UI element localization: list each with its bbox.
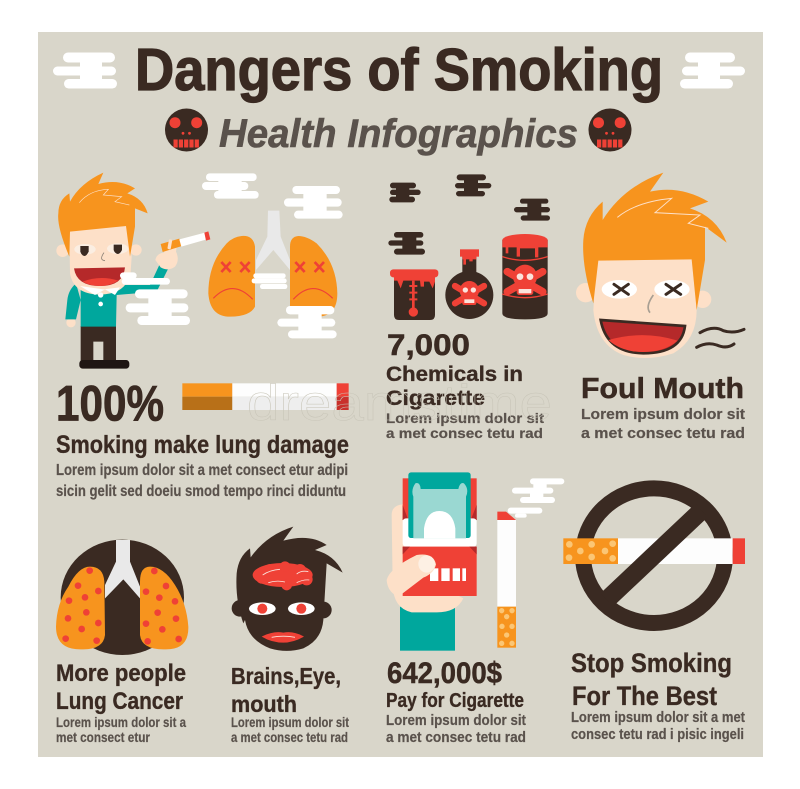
text: lung cancer body: met consect etur <box>56 730 151 745</box>
block: lung cancer text <box>56 660 186 745</box>
text: brains body <box>231 715 349 745</box>
heading: lung cancer <box>56 660 186 715</box>
illustration: pack, cigarette, no smoking <box>387 472 745 651</box>
text: foul mouth body: a met consec tetu rad <box>581 425 745 442</box>
text: chemicals body <box>386 410 544 441</box>
icon: barrel <box>502 234 548 319</box>
title: Dangers of Smoking <box>135 37 663 103</box>
heading: brains eye mouth: Brains,Eye, <box>231 663 341 689</box>
heading: pay for cigarette: Pay for Cigarette <box>386 690 524 712</box>
text: foul mouth body: Lorem ipsum dolor sit <box>581 406 745 423</box>
smoke clouds near man <box>120 272 190 325</box>
icon: right skull <box>588 108 632 152</box>
block: stop smoking text <box>571 648 745 743</box>
text: stop smoking body: consec tetu rad i pisic ingeli <box>571 727 744 743</box>
text: lung damage body: sicin gelit sed doeiu smod tempo rinci diduntu <box>56 483 346 500</box>
text: lung cancer body: Lorem ipsum dolor sit a <box>56 715 186 730</box>
text: chemicals body: a met consec tetu rad <box>386 425 543 441</box>
damaged lungs <box>208 211 337 317</box>
icon: zombie head <box>232 527 343 651</box>
text: stop smoking body: Lorem ipsum dolor sit a met <box>571 710 745 726</box>
illustration: chemicals and head <box>388 173 744 358</box>
text: brains body: a met consec tetu rad <box>231 730 348 745</box>
watermark: dreamstime <box>247 375 552 431</box>
block: pay for cigarette text <box>386 657 526 746</box>
text: foul mouth body <box>581 406 745 442</box>
icon: vertical cigarette <box>497 512 516 648</box>
heading: brains eye mouth <box>231 663 341 717</box>
stat: 100%: 100% <box>56 376 164 432</box>
icon: no smoking sign <box>563 488 745 623</box>
block: foul mouth text <box>581 373 745 442</box>
heading: foul mouth: Foul Mouth <box>581 373 744 405</box>
icon: left skull <box>165 108 208 152</box>
heading: chemicals: Chemicals in <box>386 363 523 386</box>
heading: lung cancer: Lung Cancer <box>56 688 183 715</box>
icon: hand holding pack <box>387 472 477 651</box>
text: pay body: a met consec tetu rad <box>386 729 526 746</box>
man face <box>74 243 128 286</box>
heading: cigarette: Cigarette <box>386 387 485 410</box>
stat: 7,000: 7,000 <box>387 329 470 362</box>
heading: stop smoking: Stop Smoking <box>571 648 732 678</box>
dark smoke clouds <box>388 174 550 255</box>
heading: lung damage: Smoking make lung damage <box>56 431 349 459</box>
text: stop smoking body <box>571 710 745 743</box>
heading: stop smoking <box>571 648 732 711</box>
icon: horizontal cigarette <box>182 383 349 410</box>
text: lung cancer body <box>56 715 186 745</box>
heading: brains eye mouth: mouth <box>231 691 297 717</box>
icon: cancer lungs <box>56 540 188 655</box>
text: lung damage body: Lorem ipsum dolor sit a met consect etur adipi <box>56 462 348 479</box>
smoke cloud from cigarette <box>508 478 564 518</box>
block: brains text <box>231 663 349 745</box>
hand holding cigarette <box>155 231 210 269</box>
text: brains body: Lorem ipsum dolor sit <box>231 715 349 730</box>
icon: top left cloud <box>53 52 117 88</box>
heading: stop smoking: For The Best <box>572 681 717 711</box>
text: chemicals body: Lorem ipsum dolor sit <box>386 410 544 426</box>
subtitle: Health Infographics <box>219 112 578 156</box>
man hair <box>58 173 148 257</box>
illustration: smoking man <box>56 173 343 369</box>
icon: beaker <box>390 269 438 320</box>
man body <box>56 226 168 369</box>
heading: lung cancer: More people <box>56 660 186 687</box>
text: lung damage body <box>56 462 348 500</box>
icon: flask <box>445 249 493 319</box>
text: pay body <box>386 712 526 746</box>
stat: 642,000$: 642,000$ <box>387 657 502 690</box>
icon: foul mouth head <box>576 173 744 358</box>
icon: top right cloud <box>680 52 745 88</box>
text: pay body: Lorem ipsum dolor sit <box>386 712 526 729</box>
smoke clouds around lungs <box>202 173 343 338</box>
block: chemicals text <box>386 329 544 441</box>
illustration: lung cancer and zombie head <box>56 527 343 655</box>
